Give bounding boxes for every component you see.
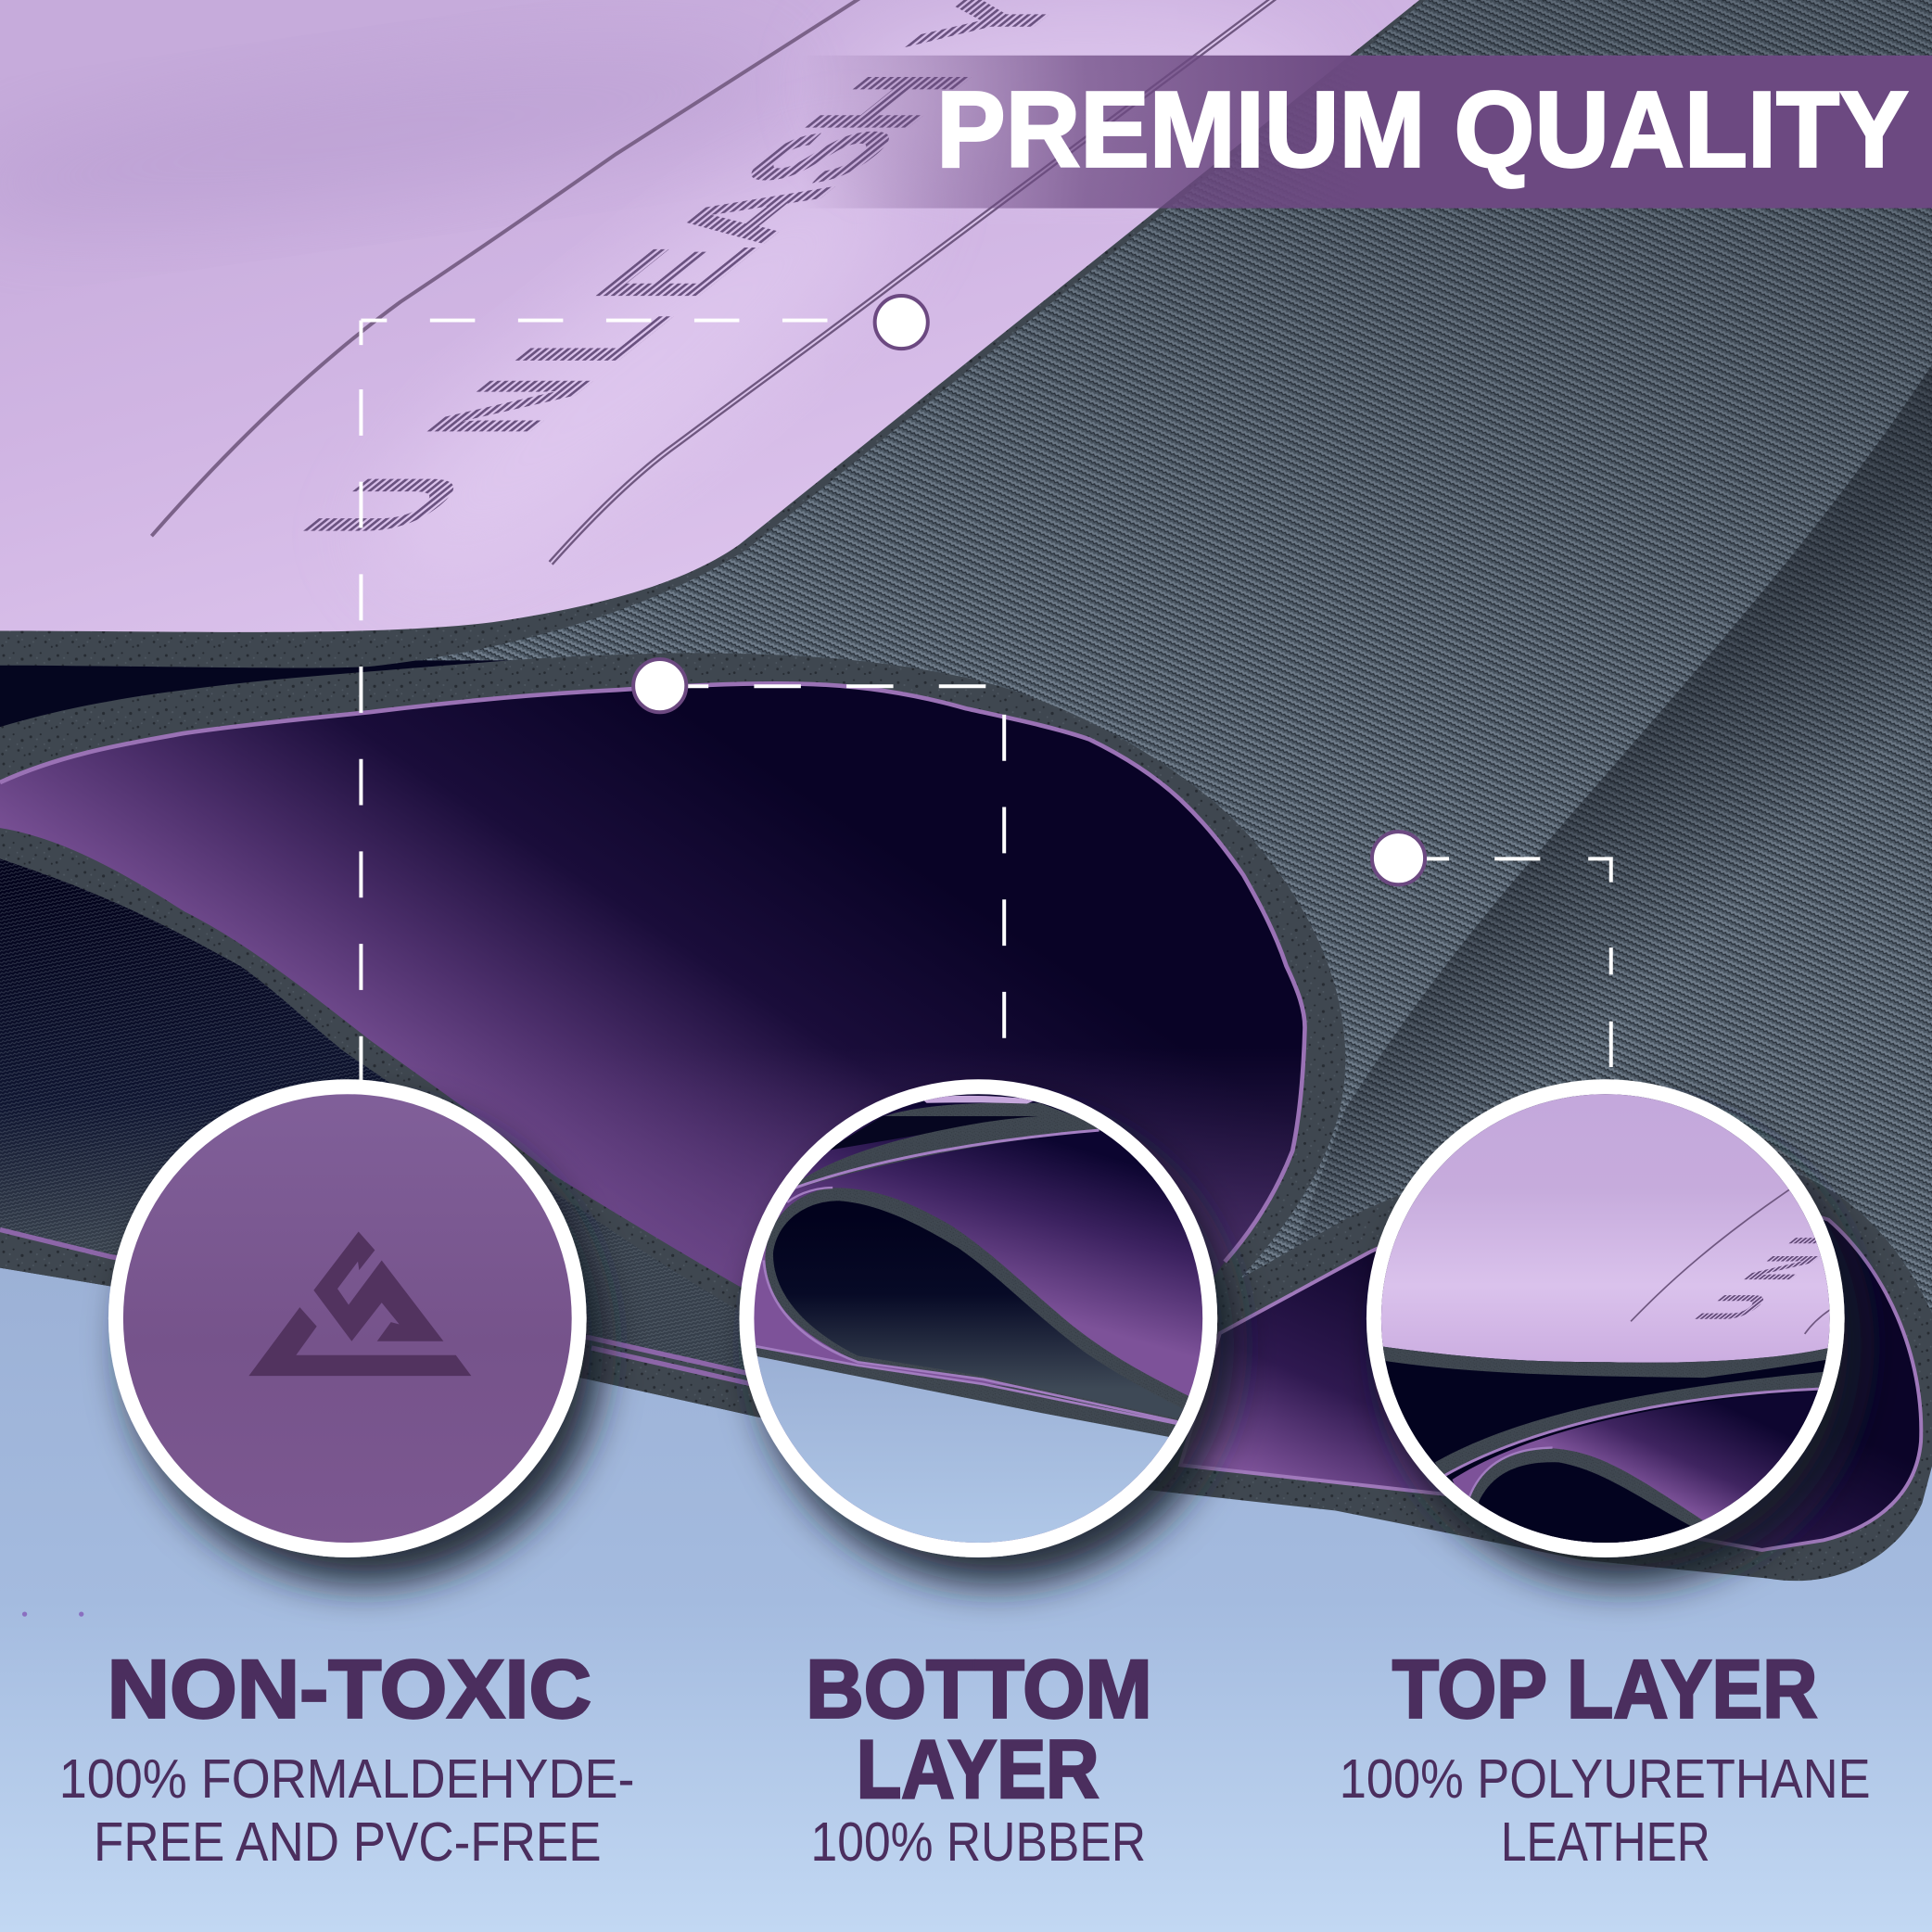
icon: triangle logo — [248, 1231, 471, 1376]
lower left mat band — [0, 838, 887, 1435]
middle sheet foam — [0, 653, 1345, 1312]
text block: non-toxic: NON-TOXIC — [108, 1643, 591, 1735]
guide line 1 — [151, 0, 869, 536]
text block: non-toxic: FREE AND PVC-FREE — [94, 1811, 602, 1873]
banner — [801, 56, 1932, 209]
woven underside of mat — [0, 0, 1932, 1380]
top sheet lilac surface — [0, 0, 1419, 635]
purple inner surface — [0, 683, 1304, 1294]
text block: top layer: TOP LAYER — [1392, 1643, 1817, 1735]
marker dot 1 — [875, 296, 928, 349]
text block: top layer: 100% POLYURETHANE — [1340, 1748, 1871, 1810]
text block: non-toxic — [59, 1643, 634, 1873]
text block: bottom layer: 100% RUBBER — [811, 1811, 1146, 1873]
callout line: bottom layer pointer — [684, 686, 1004, 1040]
callout line: third pointer — [1426, 858, 1611, 1067]
top sheet foam edge — [0, 0, 1426, 668]
text block: top layer: LEATHER — [1501, 1811, 1710, 1873]
title: PREMIUM QUALITY — [936, 69, 1909, 189]
floor specks — [22, 1611, 83, 1617]
circle: non-toxic logo closeup — [108, 1079, 587, 1557]
rolled mat loop at right — [1146, 1109, 1932, 1581]
circle: bottom layer closeup — [732, 1075, 1224, 1567]
callout line: top layer pointer — [361, 321, 827, 1081]
text block: bottom layer: LAYER — [857, 1722, 1099, 1815]
text block: top layer — [1340, 1643, 1871, 1873]
marker dot 3 — [1372, 832, 1425, 884]
guide lines in closeup — [1631, 1189, 1831, 1334]
guide line 2 — [551, 0, 1281, 563]
text block: non-toxic: 100% FORMALDEHYDE- — [59, 1748, 634, 1810]
marker dot 2 — [633, 659, 686, 712]
engraved text in closeup: UNLE — [1678, 1186, 1923, 1321]
circle: top layer closeup — [1358, 1075, 1923, 1567]
dark gap between layers — [0, 660, 517, 764]
text block: bottom layer — [806, 1643, 1152, 1873]
text block: bottom layer: BOTTOM — [806, 1643, 1152, 1735]
